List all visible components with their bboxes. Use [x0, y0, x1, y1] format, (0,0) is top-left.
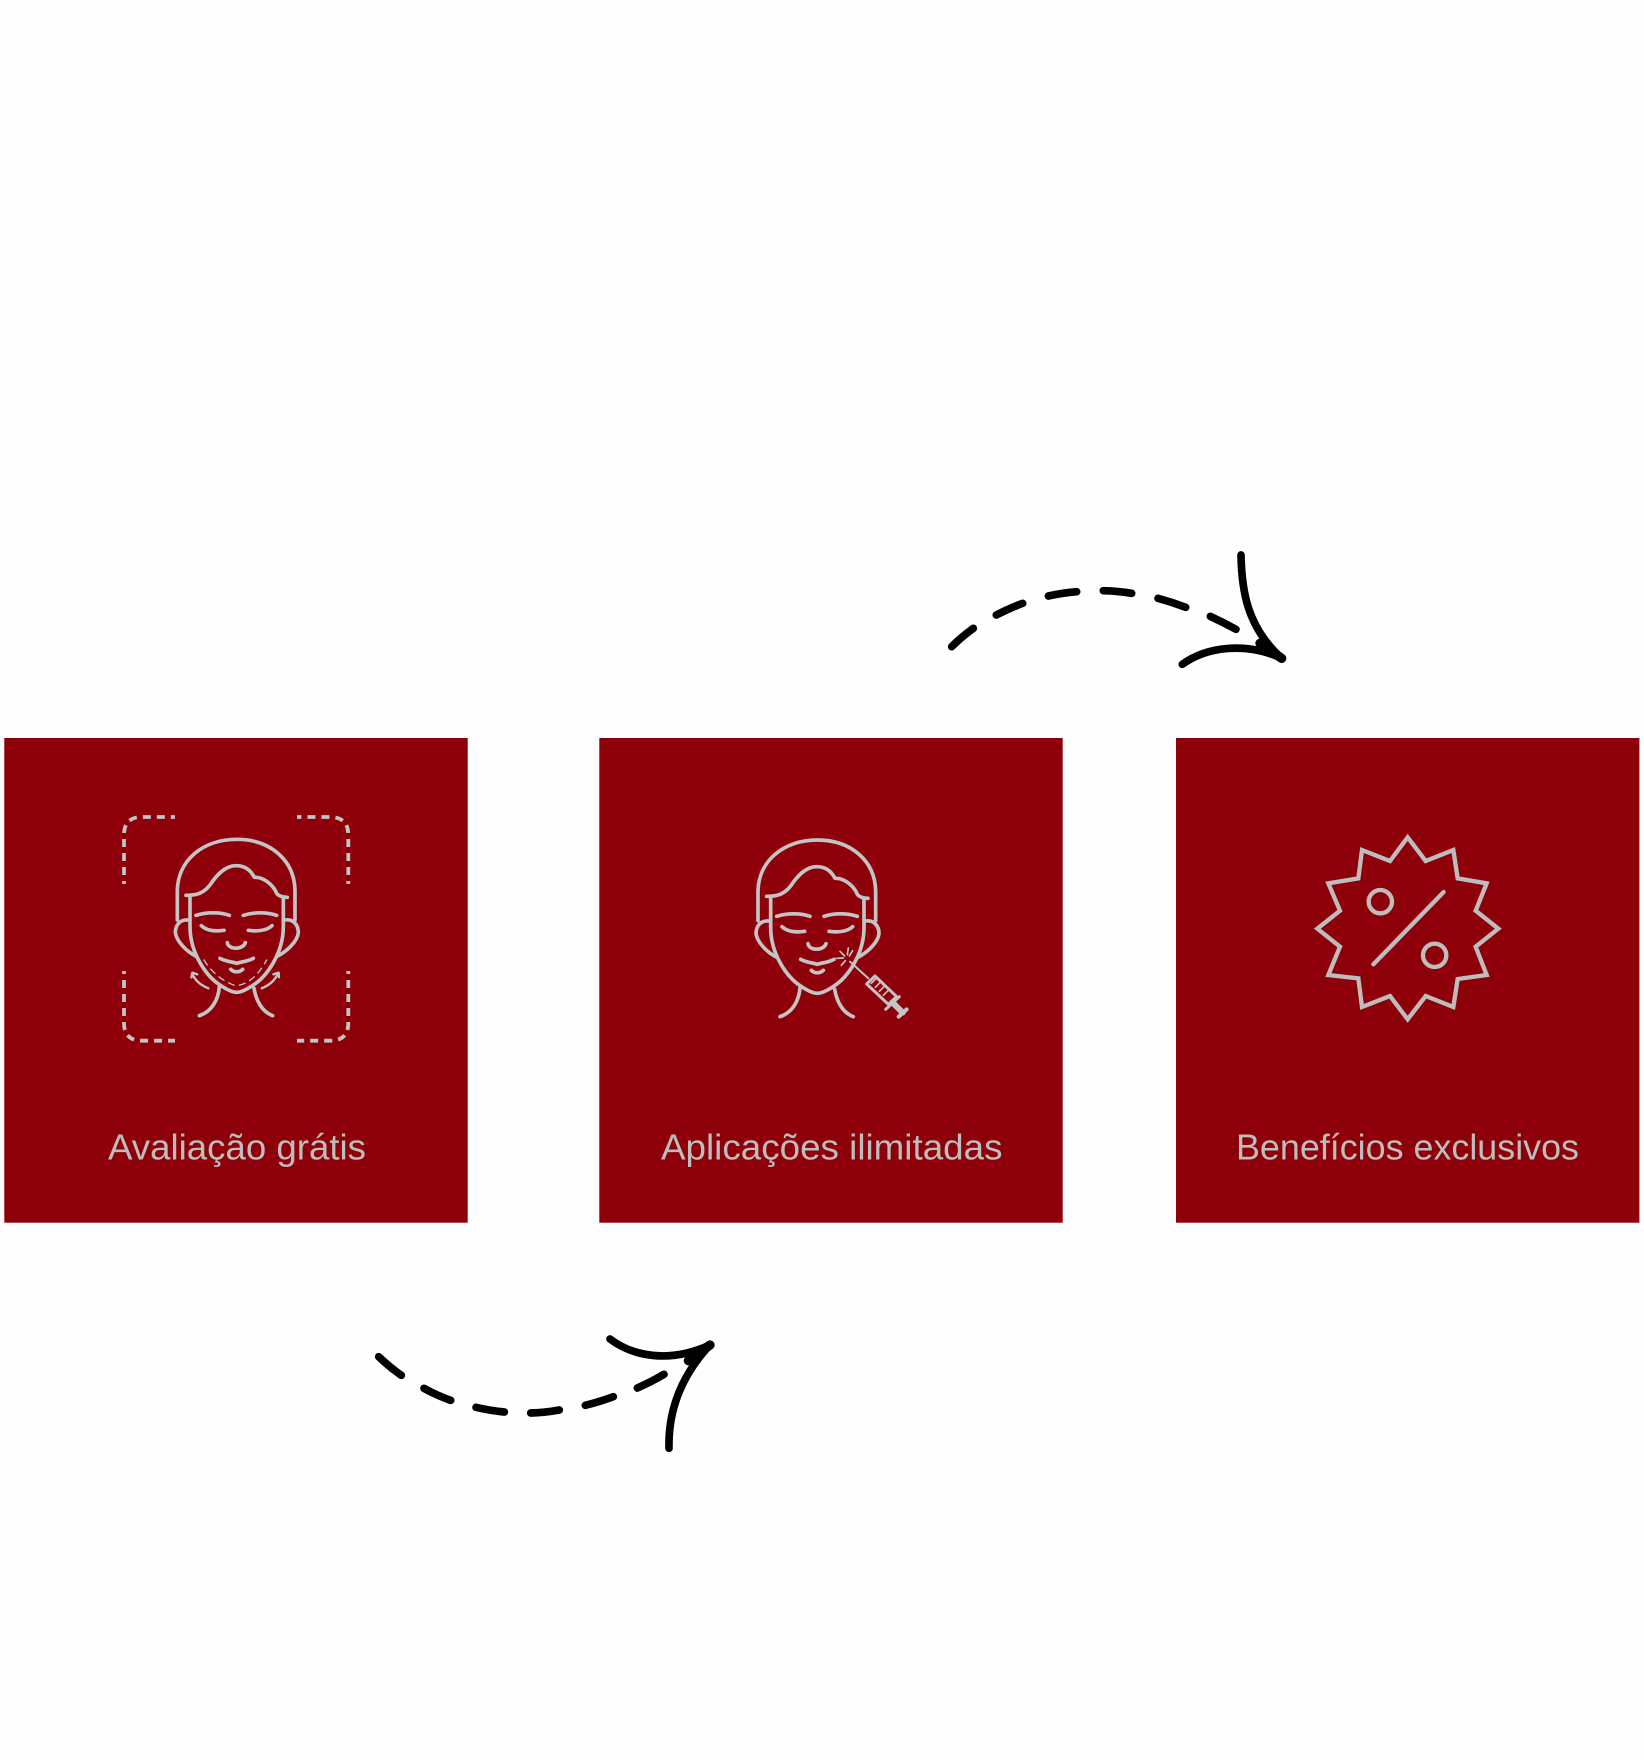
- icon: dashed scan frame: [124, 817, 348, 1041]
- panel: benefícios exclusivos: [1176, 738, 1639, 1223]
- icon: face with jawline arrows: [175, 839, 298, 1016]
- icon: discount badge: [1317, 837, 1498, 1019]
- label: Avaliação grátis: Avaliação grátis: [108, 1126, 366, 1167]
- label: Benefícios exclusivos: Benefícios exclusivos: [1236, 1126, 1579, 1167]
- icon: face with syringe: [756, 840, 907, 1017]
- icon: syringe: [837, 948, 907, 1017]
- arrow tip thickening: [688, 1345, 710, 1361]
- panel background: [4, 738, 468, 1223]
- panel background: [599, 738, 1063, 1223]
- arrow tip thickening: [1260, 643, 1282, 658]
- label: Aplicações ilimitadas: Aplicações ilimitadas: [661, 1126, 1002, 1167]
- panel background: [1176, 738, 1639, 1223]
- panel: avaliação grátis: [4, 738, 468, 1223]
- arrow: bottom dashed curve to second panel: [379, 1339, 710, 1448]
- arrow: top dashed curve to third panel: [952, 555, 1282, 664]
- panel: aplicações ilimitadas: [599, 738, 1063, 1223]
